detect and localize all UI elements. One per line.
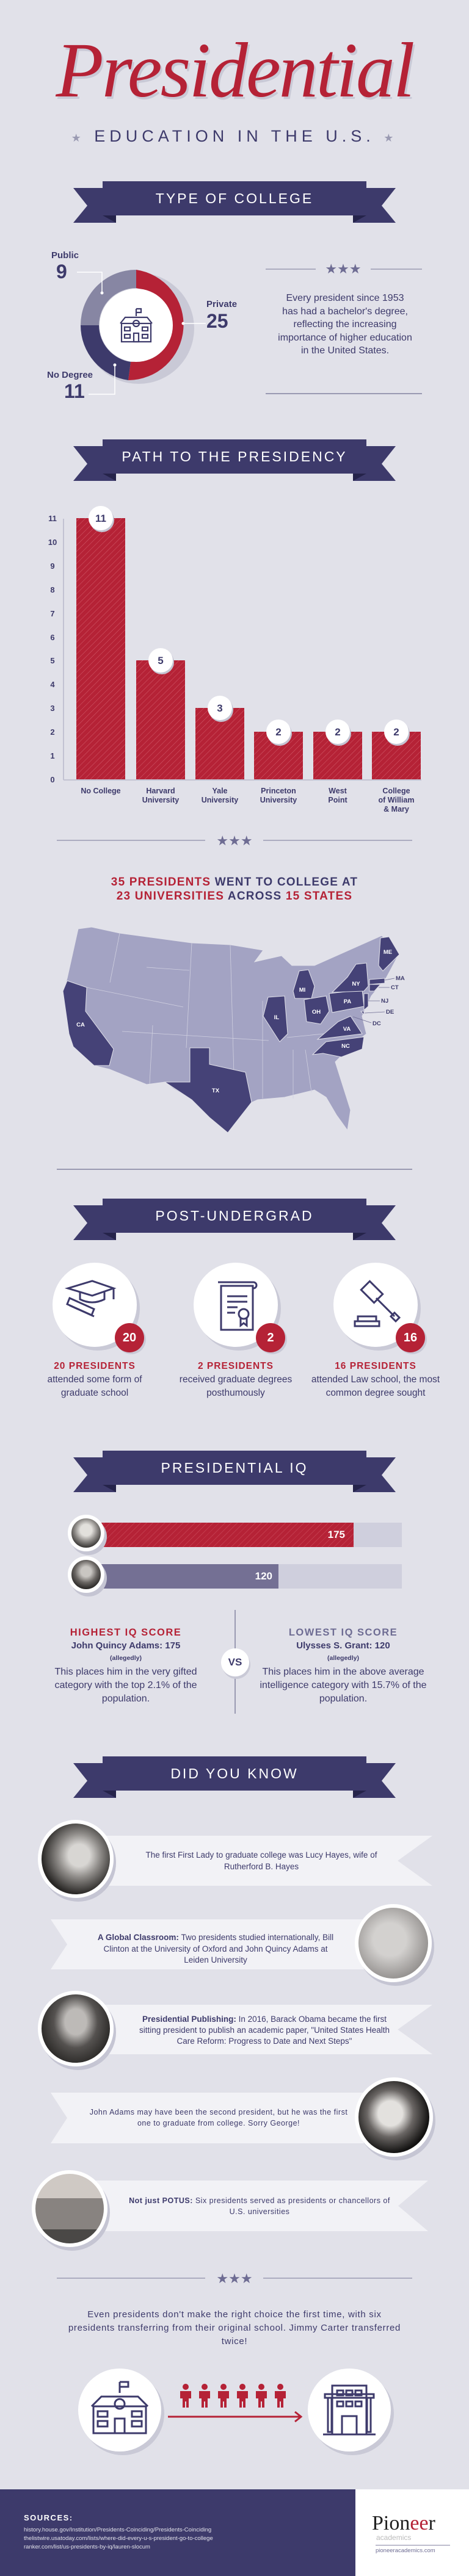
icon: diploma <box>194 1263 278 1347</box>
sources: thelistwire.usatoday.com/lists/where-did-every-u-s-president-go-to-college <box>24 2535 213 2542</box>
US map: NY <box>352 981 360 987</box>
sources: SOURCES: <box>24 2513 73 2522</box>
logo: pioneeracademics.com <box>376 2547 435 2554</box>
bar chart: 9 <box>50 561 55 571</box>
text: bachelor's degree: Every president since 1953 has had a bachelor's degree, reflecting the increasing importance of higher education in the United States. <box>278 293 412 356</box>
footer <box>0 2489 469 2576</box>
panel: law school: 16 PRESIDENTS <box>335 1361 416 1371</box>
bar chart: 2 <box>275 726 282 738</box>
highest iq: (allegedly) <box>110 1654 142 1662</box>
banner: did you know <box>73 1756 396 1798</box>
panel: posthumous <box>180 1263 292 1398</box>
US map: MA <box>396 975 405 982</box>
panel: law school: 16 <box>404 1331 417 1344</box>
bar chart: Harvard <box>146 787 175 795</box>
icon: university building <box>308 2369 391 2452</box>
bar chart: University <box>142 796 179 804</box>
banner: post-undergrad: POST-UNDERGRAD <box>155 1208 314 1224</box>
bar chart: 4 <box>50 680 55 689</box>
bar chart: West <box>329 787 347 795</box>
highest iq: This places him in the very gifted category with the top 2.1% of the population. <box>54 1667 197 1704</box>
US map: NC <box>341 1043 350 1050</box>
US map: VA <box>343 1026 351 1033</box>
fact card: global classroom <box>51 1904 434 1986</box>
bar chart <box>48 506 421 814</box>
label: public: Public <box>51 250 79 261</box>
bar chart: 2 <box>50 727 55 737</box>
transfer paragraph: Even presidents don't make the right choice the first time, with six presidents transferring from their original school. Jimmy Carter transferred twice! <box>68 2309 401 2347</box>
divider with VS: VS <box>228 1656 242 1668</box>
fact card: not just POTUS: Not just POTUS: Six presidents served as presidents or chancellors of U.S. universities <box>129 2196 390 2216</box>
icon: graduation cap <box>53 1263 137 1347</box>
arrow <box>168 2411 303 2423</box>
bar chart: 0 <box>50 775 55 784</box>
bar chart: 5 <box>158 655 164 666</box>
US map: MI <box>299 987 305 994</box>
panel: posthumous: received graduate degrees posthumously <box>180 1374 292 1398</box>
US map <box>64 928 405 1133</box>
bar chart: 7 <box>50 609 55 618</box>
bar chart: 10 <box>48 538 57 547</box>
sources: history.house.gov/Institution/Presidents-Coinciding/Presidents-Coinciding <box>24 2527 211 2533</box>
fact card: John Adams <box>51 2077 435 2160</box>
US map: PA <box>344 998 351 1005</box>
banner: presidential iq: PRESIDENTIAL IQ <box>161 1460 308 1476</box>
US map: TX <box>212 1088 220 1094</box>
logo: Pioneer <box>372 2512 435 2535</box>
fact card: Lucy Hayes <box>38 1820 432 1902</box>
bar chart: Yale <box>212 787 228 795</box>
banner: did you know: DID YOU KNOW <box>170 1766 299 1781</box>
map heading <box>111 876 358 903</box>
fact card: not just POTUS <box>32 2170 427 2251</box>
fact card: presidential publishing: Presidential Publishing: In 2016, Barack Obama became the first sitting president to publish an academic paper, "United States Health Care Reform: Progress to Date and Next Steps" <box>139 2015 390 2046</box>
label: private <box>206 299 237 332</box>
panel: posthumous: 2 PRESIDENTS <box>198 1361 274 1371</box>
label: no degree: 11 <box>64 380 85 402</box>
icon: gavel <box>333 1263 418 1347</box>
lowest iq: LOWEST IQ SCORE <box>289 1627 398 1638</box>
bar chart: 2 <box>393 726 399 738</box>
lowest iq: Ulysses S. Grant: 120 <box>296 1640 390 1651</box>
US map: OH <box>312 1009 321 1016</box>
panel: graduate school <box>47 1263 146 1398</box>
map heading: 35 PRESIDENTS WENT TO COLLEGE AT <box>111 876 358 889</box>
icon: school <box>78 2369 161 2452</box>
panel: graduate school: attended some form of graduate school <box>47 1374 142 1398</box>
US map: DC <box>373 1020 381 1027</box>
bar chart: No College <box>81 787 121 795</box>
bar chart: 11 <box>95 513 106 524</box>
banner: path to the presidency <box>73 439 396 481</box>
banner: path to the presidency: PATH TO THE PRESIDENCY <box>122 449 347 464</box>
bar chart: 6 <box>50 633 55 642</box>
panel: law school: attended Law school, the most common degree sought <box>311 1374 440 1398</box>
banner: type of college: TYPE OF COLLEGE <box>156 190 313 206</box>
banner: post-undergrad <box>73 1199 396 1240</box>
lowest iq <box>260 1627 427 1704</box>
label: public: 9 <box>56 261 67 283</box>
donut chart <box>47 250 237 402</box>
bar chart: Point <box>328 796 347 804</box>
bar chart: 8 <box>50 585 55 594</box>
bar chart: & Mary <box>384 805 409 814</box>
people <box>180 2384 286 2408</box>
map heading: 23 UNIVERSITIES ACROSS 15 STATES <box>117 890 352 903</box>
bar chart: Princeton <box>261 787 296 795</box>
bar chart: 5 <box>50 656 55 665</box>
bar chart: 3 <box>50 704 55 713</box>
fact card: global classroom: A Global Classroom: Two presidents studied internationally, Bill Clinton at the University of Oxford and John Quincy Adams at Leiden University <box>98 1933 333 1964</box>
bar chart: of William <box>379 796 414 804</box>
fact card: John Adams: John Adams may have been the second president, but he was the first one to graduate from college. Sorry George! <box>90 2108 347 2127</box>
panel: graduate school: 20 PRESIDENTS <box>54 1361 136 1371</box>
US map: ME <box>384 949 392 956</box>
US map: CA <box>76 1022 85 1028</box>
logo: academics <box>376 2533 411 2542</box>
fact card: Lucy Hayes: The first First Lady to graduate college was Lucy Hayes, wife of Rutherford B. Hayes <box>146 1850 377 1871</box>
subtitle: ★ EDUCATION IN THE U.S. ★ <box>71 127 398 145</box>
sources: ranker.com/list/us-presidents-by-iq/lauren-slocum <box>24 2544 150 2550</box>
bar chart: University <box>260 796 297 804</box>
sources <box>24 2513 213 2550</box>
highest iq: John Quincy Adams: 175 <box>71 1640 180 1651</box>
bar chart: 1 <box>50 751 55 760</box>
label: no degree: No Degree <box>47 370 93 380</box>
panel: law school <box>311 1263 440 1398</box>
bar chart: College <box>382 787 410 795</box>
label: private: Private <box>206 299 237 309</box>
US map: IL <box>274 1014 279 1021</box>
banner: type of college <box>73 181 396 223</box>
title: Presidential <box>56 27 413 114</box>
US map: NJ <box>381 998 388 1005</box>
US map: DE <box>386 1009 394 1016</box>
label: no degree <box>47 370 93 402</box>
panel: posthumous: 2 <box>267 1331 274 1344</box>
logo <box>355 2489 469 2576</box>
lowest iq: This places him in the above average intelligence category with 15.7% of the population. <box>260 1667 427 1704</box>
highest iq <box>54 1627 197 1704</box>
panel: graduate school: 20 <box>123 1331 136 1344</box>
US map: CT <box>391 984 399 991</box>
label: public <box>51 250 79 283</box>
IQ bar: 120: 120 <box>255 1570 272 1582</box>
bar chart: University <box>202 796 238 804</box>
bar chart: 2 <box>335 726 341 738</box>
bar chart: 3 <box>217 702 223 714</box>
bar chart: 11 <box>48 514 57 523</box>
IQ bar: 175: 175 <box>328 1529 345 1540</box>
transfer diagram <box>78 2369 394 2455</box>
IQ bar: 175 <box>68 1515 402 1555</box>
fact card: presidential publishing <box>38 1991 432 2070</box>
highest iq: HIGHEST IQ SCORE <box>70 1627 181 1638</box>
lowest iq: (allegedly) <box>327 1654 359 1662</box>
banner: presidential iq <box>73 1451 396 1492</box>
IQ bar: 120 <box>68 1556 402 1596</box>
label: private: 25 <box>206 310 228 332</box>
